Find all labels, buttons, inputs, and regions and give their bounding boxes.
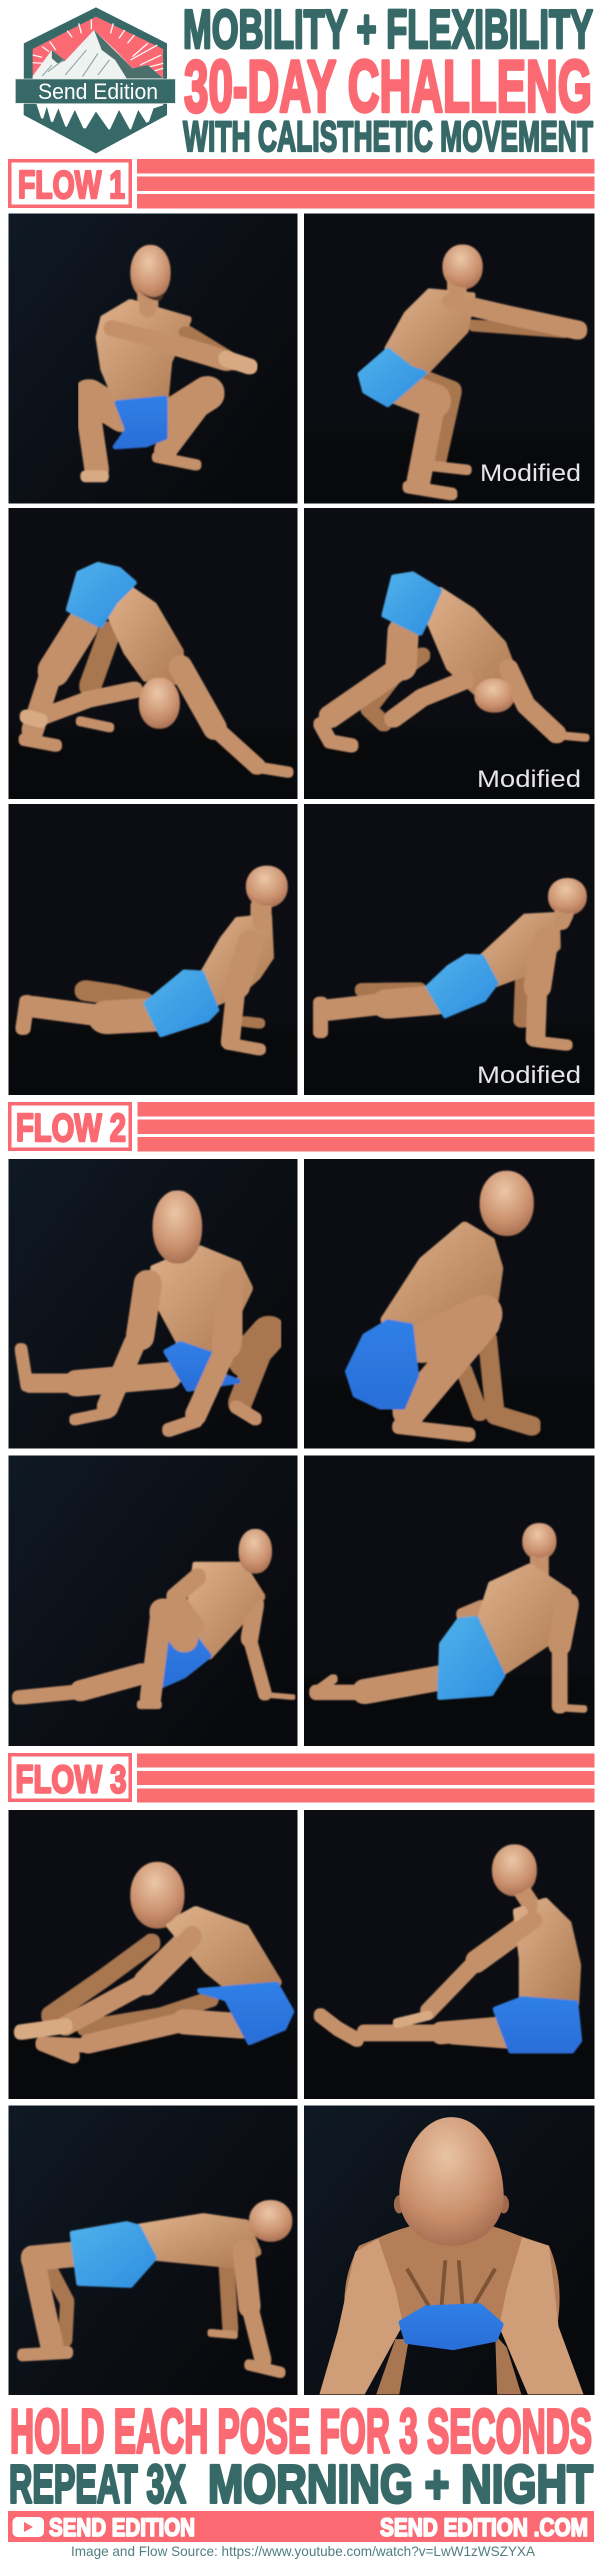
logo wordmark: Send Edition bbox=[38, 79, 158, 104]
figure: table top bridge head on bbox=[319, 2117, 584, 2394]
heading: Flow 3 bbox=[10, 1754, 594, 1802]
heading: Flow 1: FLOW 1 bbox=[18, 164, 125, 207]
panel: flow 2 pose 2 twist back bbox=[304, 1456, 594, 1746]
panel: flow 1 pose 3 low cobra bbox=[8, 804, 298, 1095]
panel: flow 3 pose 1 forward fold bbox=[8, 1810, 298, 2099]
heading: Flow 2 bbox=[10, 1102, 594, 1152]
footer: channel name: SEND EDITION bbox=[49, 2514, 195, 2542]
panel: flow 1 pose 2 modified bbox=[304, 508, 594, 799]
figure: modified pyramid bbox=[321, 574, 585, 745]
figure: pyramid with hand on ankle bbox=[25, 564, 288, 772]
panel: flow 3 pose 2 bridge front bbox=[304, 2106, 594, 2395]
panel: flow 2 pose 2 twist front bbox=[8, 1456, 298, 1746]
figure: table top bridge bbox=[23, 2201, 291, 2372]
heading: Flow 3: FLOW 3 bbox=[16, 1759, 126, 1802]
callout: repeat 3x: REPEAT 3X bbox=[9, 2454, 186, 2514]
figure: high plank lunge bbox=[321, 879, 586, 1045]
figure: chair squat side bbox=[360, 246, 578, 494]
logo: Send Edition mountain badge bbox=[15, 7, 175, 153]
label: Modified: Modified bbox=[480, 460, 581, 487]
logo banner bbox=[15, 79, 175, 103]
panel: flow 1 pose 2 hand to ankle bbox=[8, 508, 298, 799]
heading: Flow 1 bbox=[10, 159, 594, 208]
icon: youtube bbox=[12, 2517, 44, 2537]
figure: deep squat side view bbox=[347, 1172, 533, 1435]
panel: flow 1 pose 3 modified bbox=[304, 804, 594, 1095]
panel: flow 1 pose 1 squat bbox=[8, 214, 298, 504]
panel: flow 2 pose 1 front bbox=[8, 1159, 298, 1448]
figure: upward lunge side bbox=[23, 867, 287, 1049]
figure: deep squat front bbox=[86, 246, 250, 476]
figure: seated twist front bbox=[19, 1530, 293, 1705]
panel: flow 2 pose 1 side bbox=[304, 1159, 594, 1448]
figure: side lunge front view bbox=[21, 1192, 269, 1430]
label: Modified: Modified bbox=[477, 1062, 581, 1089]
figure: seated forward fold bbox=[21, 1863, 292, 2056]
footer bar bbox=[8, 2511, 594, 2542]
panel: flow 1 pose 1 modified bbox=[304, 214, 594, 504]
panel: flow 3 pose 1 upright bbox=[304, 1810, 594, 2099]
source credit: Image and Flow Source: https://www.youtube.com/watch?v=LwW1zWSZYXA bbox=[71, 2543, 536, 2559]
figure: seated upright reach bbox=[321, 1845, 580, 2051]
panel: flow 3 pose 2 bridge side bbox=[8, 2106, 298, 2395]
figure: seated twist back bbox=[317, 1524, 584, 1709]
label: Modified: Modified bbox=[477, 766, 581, 793]
heading: Flow 2: FLOW 2 bbox=[16, 1107, 126, 1150]
